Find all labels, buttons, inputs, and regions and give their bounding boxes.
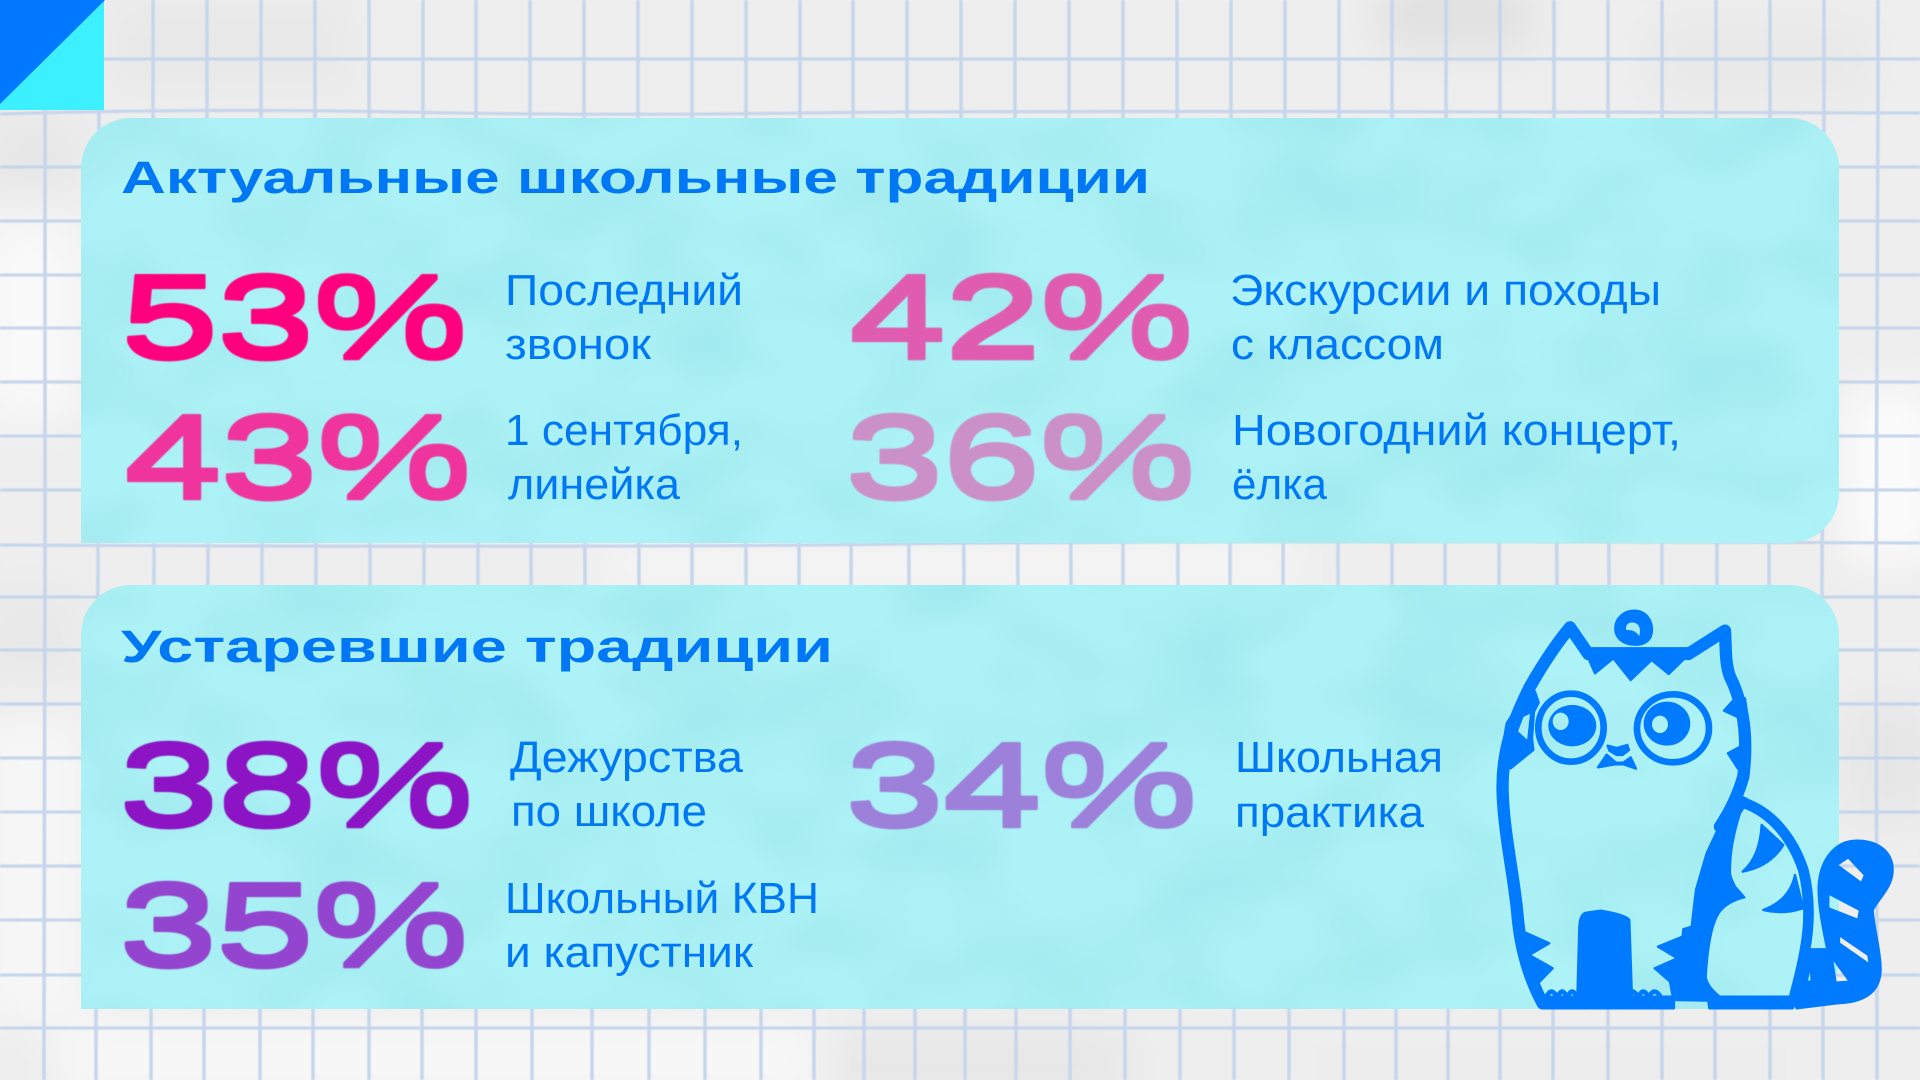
stat: 36%: Новогодний концерт, [1232, 406, 1681, 455]
stat: 38%: 38% [120, 720, 473, 850]
heading: Устаревшие традиции [121, 621, 833, 672]
cat outline [1503, 627, 1745, 1003]
stat: 42%: 42% [850, 252, 1193, 382]
stat: 36%: ёлка [1232, 460, 1328, 509]
stat: 34%: Школьная [1235, 733, 1443, 782]
stat: 34%: 34% [846, 720, 1197, 850]
stat: 43%: линейка [508, 460, 681, 509]
stat: 43% [125, 392, 743, 522]
panel: current school traditions [81, 118, 1839, 543]
stat: 34%: практика [1235, 788, 1425, 837]
stat: 53%: 53% [122, 252, 467, 382]
haunch stripes [1743, 825, 1803, 912]
panel: outdated traditions [81, 585, 1839, 1009]
stat: 42%: с классом [1231, 320, 1444, 369]
stat: 38%: Дежурства [510, 733, 744, 782]
right cheek stripes [1724, 697, 1749, 773]
stat: 35% [120, 860, 819, 990]
head stripes [1584, 648, 1695, 680]
stat: 38% [120, 720, 744, 850]
icon: blue tabby cat [1499, 611, 1893, 1008]
stat: 35%: 35% [120, 860, 468, 990]
left leg stripes [1524, 932, 1553, 983]
left eye [1538, 694, 1604, 762]
right leg and haunch mass [1655, 793, 1748, 1001]
stat: 36% [846, 392, 1681, 522]
centre leg [1577, 911, 1632, 1008]
stat: 42% [850, 252, 1661, 382]
stat: 43%: 43% [125, 392, 471, 522]
nose and mouth [1598, 745, 1636, 769]
stat: 43%: 1 сентября, [505, 406, 743, 455]
stat: 35%: Школьный КВН [505, 874, 819, 923]
curl [1615, 611, 1652, 645]
left cheek stripes [1499, 687, 1539, 768]
corner mark [0, 0, 105, 110]
stat: 34% [846, 720, 1443, 850]
heading: Актуальные школьные традиции [121, 152, 1150, 203]
haunch outline [1745, 803, 1809, 1001]
right eye [1637, 694, 1709, 762]
stat: 36%: 36% [846, 392, 1195, 522]
stat: 53%: звонок [505, 320, 652, 369]
base and toes [1541, 997, 1797, 1008]
stat: 53% [122, 252, 743, 382]
stat: 42%: Экскурсии и походы [1230, 266, 1661, 315]
stat: 53%: Последний [505, 266, 743, 315]
tail [1793, 841, 1893, 1008]
stat: 35%: и капустник [505, 928, 754, 977]
stat: 38%: по школе [511, 787, 707, 836]
